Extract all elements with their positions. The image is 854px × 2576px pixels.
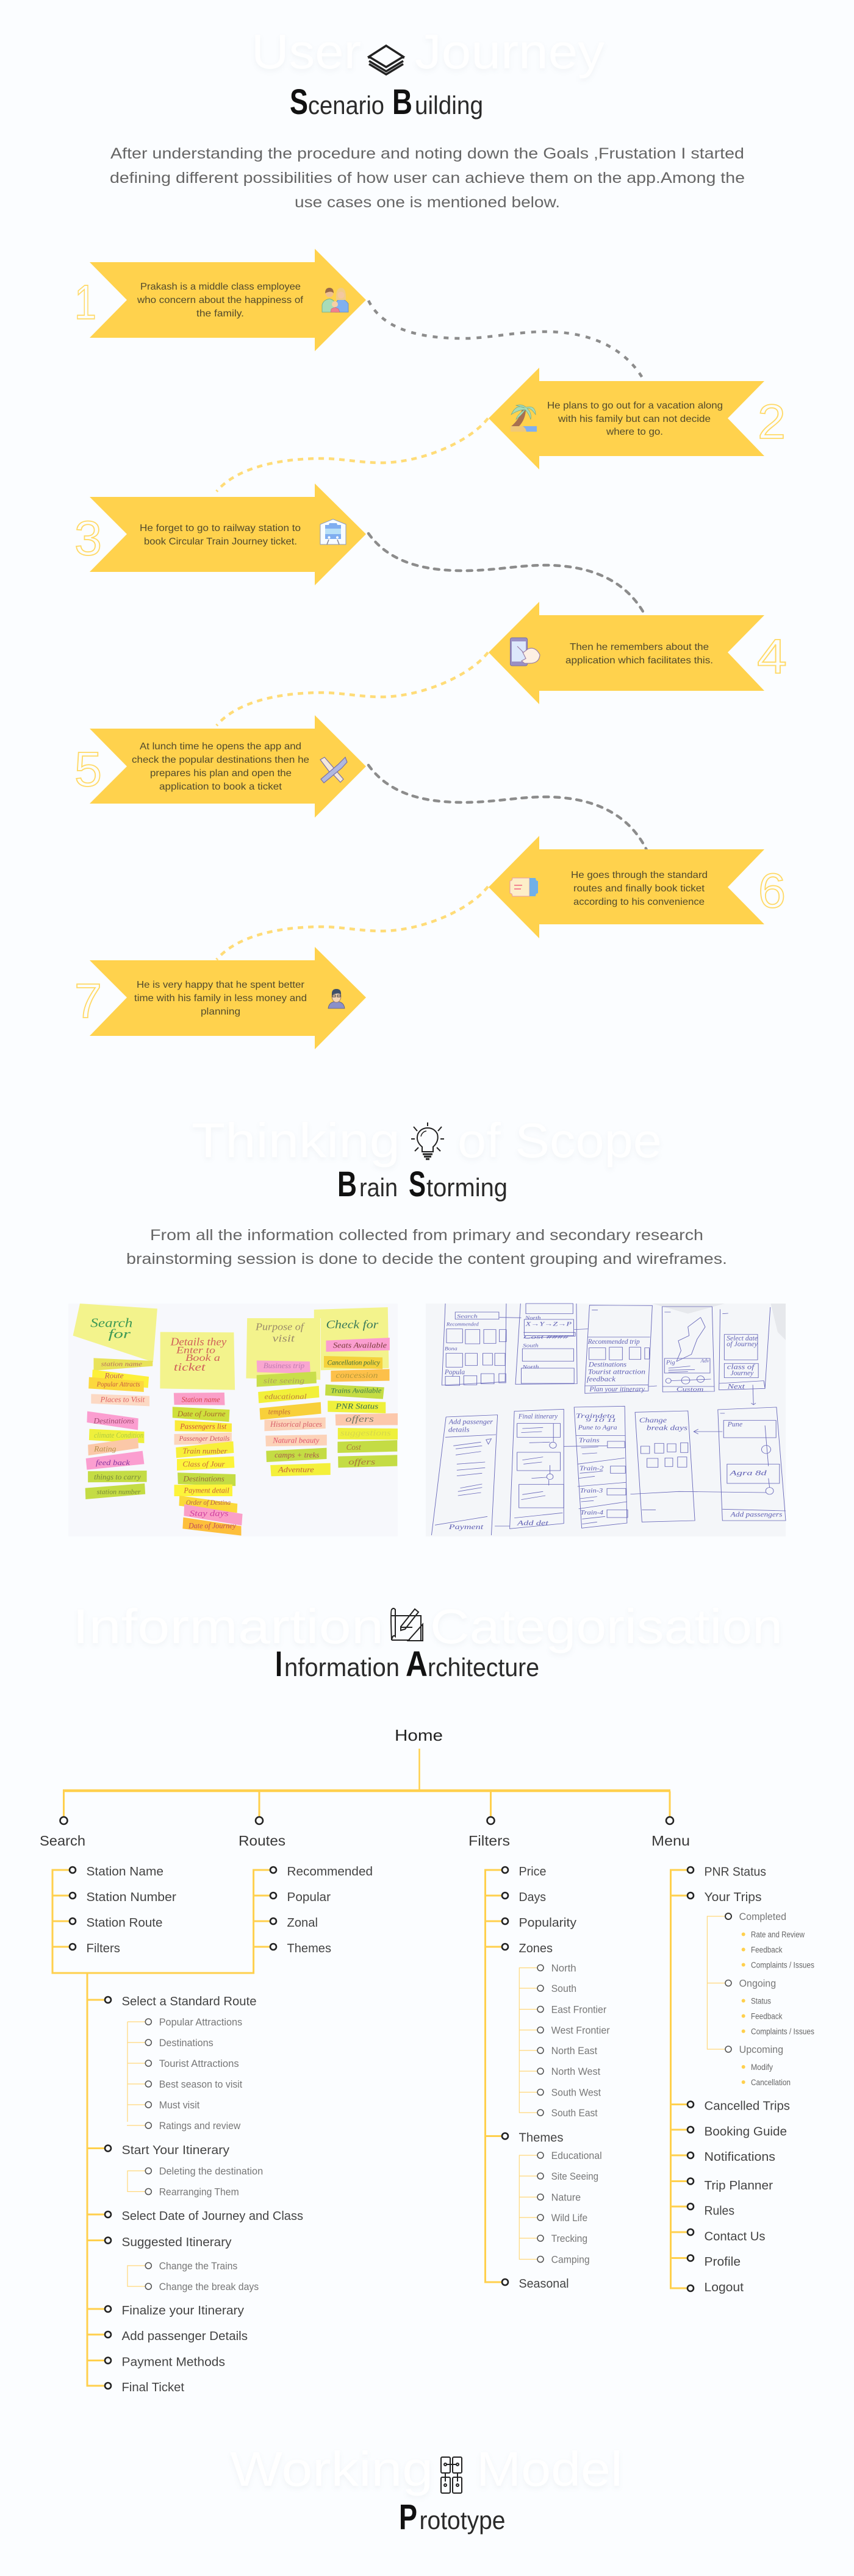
arrow 1: [90, 249, 366, 351]
sketch: journey date: Select date: [727, 1334, 758, 1342]
sub-branch: zones and themes: South: [551, 1983, 576, 1994]
connector: step 4 to 5: [217, 652, 488, 726]
heading: Prototype: P: [399, 2497, 417, 2537]
step 2: [489, 368, 786, 469]
notes column: purpose of visit: Historical places: [270, 1420, 322, 1429]
step 6: [489, 836, 786, 938]
notes column: check for: Trains Available: [331, 1388, 381, 1395]
sketch: add passenger details: [431, 1415, 498, 1535]
intro paragraph: After understanding the procedure and noting down the Goals ,Frustation I started: [110, 145, 744, 162]
sub-branch: your trips: Status: [751, 1996, 771, 2006]
notes column: purpose of visit: camps + treks: [274, 1451, 319, 1460]
sketch: home screen: Recommended: [446, 1322, 479, 1327]
branch: Filters: [468, 1833, 610, 2291]
icon: layers: [369, 46, 403, 74]
notes column: search for: Rating: [93, 1445, 117, 1454]
notes column: search for: Popular Attracts: [96, 1380, 140, 1388]
text 2: He plans to go out for a vacation along: [547, 401, 723, 411]
ghost title: Working Model: Working: [230, 2442, 433, 2496]
sketch: add passenger details: Payment: [448, 1523, 484, 1531]
sketch: final itinerary: Final itinerary: [518, 1412, 558, 1420]
branch: Menu: Trip Planner: [704, 2179, 773, 2192]
text 6: He goes through the standard: [571, 870, 708, 880]
heading: Information Architecture: A: [406, 1644, 428, 1684]
icon: phone and hand: [510, 638, 540, 666]
sub-branch: zones and themes: Camping: [551, 2253, 590, 2266]
sketch: change break days: break days: [647, 1424, 687, 1432]
ghost title: User Journey: User: [251, 24, 361, 79]
sub-branch: your trips: Complaints / Issues: [751, 2027, 814, 2036]
sub-branch: journey steps: Rearranging Them: [159, 2186, 239, 2197]
sub-branch: journey steps: Must visit: [159, 2099, 199, 2111]
sub-branch: journey steps: Tourist Attractions: [159, 2058, 239, 2069]
ghost title: Thinking of Scope: of Scope: [458, 1113, 662, 1168]
heading: Brain Storming: B: [337, 1165, 357, 1204]
branch: Menu: Profile: [704, 2255, 741, 2269]
branch: Search: Filters: [87, 1942, 120, 1955]
heading: Scenario Building: S: [290, 82, 308, 122]
notes column: search for: station name: [101, 1361, 142, 1368]
intro paragraph: use cases one is mentioned below.: [295, 194, 560, 211]
sub-branch: zones and themes: North East: [551, 2045, 597, 2057]
text 5: application to book a ticket: [159, 782, 282, 792]
sketch: train selection: Traindeta: [576, 1413, 615, 1419]
branch: Filters: Days: [518, 1891, 546, 1904]
sketch: train selection: Pune to Agra: [577, 1424, 617, 1431]
sub-branch: journey steps: [87, 1973, 303, 2394]
sketch: train selection: 9 10 11: [586, 1418, 617, 1424]
heading: Information Architecture: rchitecture: [428, 1653, 539, 1682]
notes column: search for: things to carry: [94, 1473, 141, 1481]
sketch: route list: Cost ####: [523, 1335, 569, 1340]
sub-branch: your trips: Complaints / Issues: [751, 1961, 814, 1969]
section: brainstorming: [68, 1113, 786, 1536]
text 2: [547, 401, 723, 437]
arrow 4: [489, 602, 764, 704]
number 5: 5: [74, 742, 102, 796]
sketch: final itinerary: [495, 1409, 564, 1529]
sketch: route plan: [718, 1407, 786, 1521]
sketch: journey date: [719, 1307, 770, 1405]
sub-branch: your trips: Ongoing: [739, 1978, 776, 1989]
notes column: check for: Cancellation policy: [328, 1360, 381, 1367]
sub-branch: zones and themes: Site Seeing: [551, 2171, 598, 2182]
text 5: prepares his plan and open the: [150, 768, 292, 779]
sub-branch: your trips: Feedback: [751, 1945, 783, 1955]
sketch: route plan: Agra 8d: [729, 1469, 767, 1477]
sub-branch: journey steps: Best season to visit: [159, 2078, 242, 2090]
tree trunk connectors: [60, 1749, 673, 1824]
sketch: route list: North: [525, 1315, 541, 1321]
text 7: planning: [201, 1007, 240, 1017]
text 7: [134, 980, 307, 1017]
branch: Menu: Your Trips: [704, 1891, 761, 1904]
number 3: 3: [74, 511, 102, 565]
notes column: details they enter: Order of Destina: [186, 1499, 231, 1507]
sub-branch: zones and themes: North: [551, 1962, 576, 1974]
arrow 3: [90, 483, 366, 585]
branch: Menu: Booking Guide: [704, 2125, 787, 2139]
sub-branch: your trips: Upcoming: [739, 2044, 783, 2055]
icon: man with glasses: [328, 989, 345, 1008]
branch: Menu: Cancelled Trips: [704, 2100, 790, 2113]
sketch: trip detail: Destinations: [588, 1360, 626, 1368]
text 4: Then he remembers about the: [570, 642, 709, 652]
ghost title: Working Model: Model: [476, 2442, 622, 2496]
step 7: [74, 947, 366, 1049]
branch: Search: [40, 1833, 303, 2394]
brainstorm paragraph: brainstorming session is done to decide the content grouping and wireframes.: [126, 1251, 727, 1268]
intro paragraph: defining different possibilities of how user can achieve them on the app.Among the: [110, 169, 745, 187]
connector: step 6 to 7: [217, 887, 488, 960]
sketch: journey date: Journey: [731, 1369, 754, 1377]
notes column: purpose of visit: site seeing: [264, 1377, 305, 1385]
heading: Brain Storming: torming: [426, 1173, 508, 1202]
sub-branch: your trips: Cancellation: [751, 2078, 791, 2087]
notes column: details they enter: Date of Journey: [188, 1521, 236, 1530]
sketch: home screen: Popula: [444, 1368, 465, 1376]
sketch: route list: [515, 1304, 588, 1384]
icon: blueprint and pencil: [391, 1608, 423, 1641]
label: Filters: Filters: [468, 1833, 510, 1849]
sub-branch: zones and themes: Trecking: [551, 2233, 587, 2244]
connector: step 3 to 4: [368, 533, 648, 621]
tree root: Home: Home: [395, 1726, 443, 1744]
notes column: search for: Destinations: [93, 1417, 134, 1425]
sub-branch: journey steps: Select Date of Journey and Class: [122, 2210, 303, 2223]
sketch: map route: Adv: [700, 1358, 709, 1364]
branch: Menu: PNR Status: [704, 1866, 766, 1879]
section: information architecture: [40, 1599, 814, 2394]
notes column: purpose of visit: Natural beauty: [272, 1436, 320, 1445]
sub-branch: zones and themes: North West: [551, 2066, 600, 2077]
branch: Filters: Themes: [518, 2132, 564, 2145]
notes column: details they enter: Station name: [182, 1396, 220, 1404]
text 6: routes and finally book ticket: [573, 883, 705, 894]
notes column: purpose of visit: [246, 1318, 331, 1476]
sub-branch: zones and themes: Nature: [551, 2191, 581, 2203]
sub-branch: journey steps: Change the break days: [159, 2281, 259, 2292]
notes column: details they enter: Destinations: [182, 1475, 224, 1483]
section: prototype: [230, 2442, 622, 2537]
label: Menu: Menu: [651, 1833, 690, 1849]
number 6: 6: [758, 863, 786, 918]
notes column: search for: for: [109, 1327, 131, 1341]
heading: Scenario Building: cenario: [308, 91, 384, 120]
sub-branch: journey steps: Add passenger Details: [122, 2330, 248, 2343]
text 3: book Circular Train Journey ticket.: [144, 537, 297, 547]
sketch: trip detail: feedback: [587, 1375, 616, 1383]
notes column: check for: concession: [336, 1371, 378, 1380]
notes column: check for: offers: [348, 1457, 375, 1466]
sub-branch: your trips: [707, 1911, 814, 2087]
icon: light bulb: [411, 1122, 444, 1159]
ghost title: User Journey: Journey: [415, 24, 605, 79]
sub-branch: your trips: Rate and Review: [751, 1930, 805, 1939]
sub-branch: journey steps: Start Your Itinerary: [122, 2144, 229, 2157]
branch: Menu: Contact Us: [704, 2230, 765, 2244]
sketch: change break days: [631, 1411, 766, 1522]
sub-branch: zones and themes: [519, 1962, 610, 2266]
sketch: map route: [662, 1307, 714, 1393]
notes column: purpose of visit: visit: [273, 1332, 295, 1344]
sub-branch: journey steps: Payment Methods: [122, 2356, 225, 2369]
photo: wireframe sketches: [426, 1304, 786, 1536]
step 1: [74, 249, 366, 351]
text 5: check the popular destinations then he: [132, 755, 309, 765]
sketch: trip detail: Plan your itinerary: [589, 1385, 645, 1393]
heading: Prototype: rototype: [420, 2506, 505, 2535]
heading: Information Architecture: I: [275, 1644, 282, 1684]
step 5: [74, 715, 366, 818]
icon: ticket: [510, 878, 538, 896]
sketch: trip detail: Recommended trip: [587, 1338, 640, 1346]
text 2: where to go.: [606, 427, 663, 437]
notes column: check for: Cost: [346, 1443, 362, 1452]
notes column: purpose of visit: temples: [268, 1408, 290, 1416]
text 2: with his family but can not decide: [558, 414, 711, 424]
sketch: journey date: class of: [727, 1363, 755, 1371]
sketch: home screen: Bona: [445, 1346, 458, 1352]
text 1: Prakash is a middle class employee: [140, 282, 301, 292]
notes column: check for: Seats Available: [333, 1341, 387, 1350]
sub-branch: zones and themes: Wild Life: [551, 2212, 587, 2224]
branch: Menu: Logout: [704, 2281, 744, 2294]
notes column: check for: offers: [345, 1415, 374, 1424]
sub-branch: journey steps: Change the Trains: [159, 2260, 237, 2272]
intro paragraph: [110, 145, 745, 211]
text 7: time with his family in less money and: [134, 993, 307, 1004]
branch: Filters: Zones: [518, 1942, 553, 1955]
ghost title: Informartion Categorisation: Categorisation: [430, 1599, 783, 1654]
notes column: purpose of visit: Purpose of: [255, 1321, 305, 1332]
label: Search: Search: [40, 1833, 85, 1849]
text 6: according to his convenience: [573, 897, 705, 907]
sub-branch: journey steps: Final Ticket: [122, 2381, 184, 2394]
branch: Filters: Seasonal: [518, 2277, 569, 2291]
branch: Search: Station Number: [87, 1891, 176, 1904]
text 5: At lunch time he opens the app and: [140, 741, 301, 752]
sub-branch: journey steps: Suggested Itinerary: [122, 2236, 232, 2249]
notes column: check for: PNR Status: [335, 1402, 378, 1411]
sketch: trip detail: [585, 1305, 657, 1393]
sketch: journey date: Next: [727, 1382, 745, 1390]
notes column: details they enter: Book a: [185, 1353, 220, 1363]
text 3: [140, 523, 301, 547]
sub-branch: your trips: Feedback: [751, 2012, 783, 2021]
notes column: purpose of visit: Adventure: [278, 1466, 314, 1474]
sketch: train selection: Train-4: [580, 1510, 604, 1516]
sub-branch: zones and themes: West Frontier: [551, 2024, 610, 2036]
sketch: map route: Pig: [666, 1360, 675, 1366]
notes column: details they enter: Class of Jour: [182, 1460, 225, 1468]
sub-branch: journey steps: Finalize your Itinerary: [122, 2304, 244, 2317]
photo: sticky notes: [68, 1304, 398, 1536]
sketch: train selection: [564, 1406, 628, 1528]
notes column: search for: Places to Visit: [100, 1396, 145, 1404]
sketch: final itinerary: Add det: [517, 1519, 549, 1527]
notes column: check for: Check for: [326, 1319, 379, 1332]
sketch: route plan: Add passengers: [730, 1510, 783, 1518]
notes column: details they enter: Details they: [170, 1336, 227, 1347]
brainstorm paragraph: From all the information collected from primary and secondary research: [150, 1227, 703, 1244]
text 7: He is very happy that he spent better: [137, 980, 305, 990]
sub-branch: your trips: Modify: [751, 2063, 773, 2072]
branch: Routes: [239, 1833, 373, 1955]
heading: Scenario Building: uilding: [415, 91, 483, 120]
sub-branch: journey steps: Ratings and review: [159, 2120, 241, 2132]
sketch: home screen: Search: [457, 1314, 478, 1319]
sketch: train selection: Trains: [579, 1437, 600, 1444]
sub-branch: your trips: Completed: [739, 1911, 786, 1922]
sketch: route list: North: [522, 1365, 539, 1370]
text 1: who concern about the happiness of: [137, 295, 304, 305]
branch: Menu: Rules: [704, 2205, 734, 2218]
notes column: details they enter: Payment detail: [183, 1486, 229, 1495]
notes column: details they enter: Passengers list: [179, 1422, 227, 1430]
arrow 6: [489, 836, 764, 938]
branch: Filters: Price: [518, 1865, 547, 1878]
branch: Routes: Themes: [287, 1942, 331, 1955]
notes column: purpose of visit: educational: [265, 1393, 307, 1401]
sketch: route list: X→Y→Z→P: [525, 1321, 572, 1327]
notes column: details they enter: Train number: [182, 1447, 228, 1455]
icon: palm tree: [511, 405, 537, 432]
sketch: trip detail: Tourist attraction: [588, 1368, 645, 1375]
sub-branch: zones and themes: Educational: [551, 2150, 602, 2161]
sketch: train selection: Train-3: [580, 1488, 603, 1494]
sketch: home screen: [442, 1304, 521, 1385]
branch: Filters: Popularity: [518, 1916, 576, 1930]
arrow 7: [90, 947, 366, 1049]
brainstorm paragraph: [126, 1227, 727, 1268]
branch: Search: Station Name: [87, 1865, 163, 1878]
step 4: [489, 602, 787, 704]
notes column: search for: climate Condition: [94, 1431, 143, 1440]
icon: train: [320, 519, 346, 544]
notes column: check for: [314, 1307, 398, 1468]
sub-branch: zones and themes: South West: [551, 2086, 601, 2099]
section: user journey: [110, 24, 745, 211]
text 5: [132, 741, 309, 792]
branch: Routes: Popular: [287, 1891, 331, 1904]
sketch: change break days: Change: [639, 1416, 667, 1424]
sketch: train selection: Train-2: [580, 1465, 604, 1472]
number 4: 4: [757, 629, 787, 683]
number 1: 1: [74, 275, 96, 329]
notes column: details they enter: Passenger Details: [179, 1435, 230, 1443]
text 1: [137, 282, 304, 319]
sub-branch: journey steps: Select a Standard Route: [122, 1995, 256, 2008]
icon: connected screens: [441, 2457, 462, 2493]
text 6: [571, 870, 708, 907]
icon: knife and fork: [320, 757, 347, 783]
heading: Brain Storming: S: [409, 1165, 426, 1204]
text 4: application which facilitates this.: [565, 655, 713, 666]
sketch: route plan: Pune: [727, 1420, 743, 1428]
text 1: the family.: [196, 309, 244, 319]
number 2: 2: [758, 394, 786, 449]
notes column: search for: [73, 1304, 157, 1499]
sub-branch: zones and themes: South East: [551, 2107, 598, 2119]
icon: family: [322, 288, 348, 312]
sketch: add passenger details: Add passenger: [448, 1418, 493, 1425]
notes column: search for: station number: [97, 1489, 141, 1496]
sketch: map route: Custom: [676, 1386, 703, 1393]
branch: Routes: Recommended: [287, 1865, 373, 1878]
text 3: He forget to go to railway station to: [140, 523, 301, 533]
heading: Information Architecture: nformation: [284, 1653, 400, 1682]
branch: Menu: Notifications: [704, 2150, 775, 2164]
sketch: journey date: of Journey: [727, 1340, 758, 1348]
notes column: details they enter: [160, 1332, 243, 1536]
label: Routes: Routes: [239, 1833, 285, 1849]
notes column: details they enter: Stay days: [190, 1509, 229, 1518]
notes column: details they enter: ticket: [174, 1361, 206, 1373]
notes column: details they enter: Enter to: [176, 1346, 215, 1356]
sketch: add passenger details: details: [448, 1425, 470, 1433]
branch: Routes: Zonal: [287, 1916, 318, 1930]
sub-branch: journey steps: Popular Attractions: [159, 2016, 242, 2028]
notes column: search for: feed back: [96, 1458, 130, 1467]
sub-branch: journey steps: Destinations: [159, 2037, 214, 2049]
notes column: check for: suggestions: [340, 1429, 391, 1438]
connector: step 2 to 3: [217, 418, 488, 491]
sub-branch: journey steps: Deleting the destination: [159, 2166, 263, 2177]
sub-branch: zones and themes: East Frontier: [551, 2003, 606, 2016]
ghost title: Informartion Categorisation: Informartion: [73, 1599, 384, 1654]
arrow 5: [90, 715, 366, 818]
connector: step 1 to 2: [368, 301, 643, 379]
sketch: route list: South: [523, 1343, 539, 1349]
text 4: [565, 642, 713, 666]
branch: Menu: [651, 1833, 814, 2294]
heading: Brain Storming: rain: [359, 1173, 398, 1202]
step 3: [74, 483, 366, 585]
notes column: details they enter: Date of Journe: [177, 1410, 226, 1418]
notes column: search for: Route: [104, 1372, 124, 1380]
ghost title: Thinking of Scope: Thinking: [192, 1113, 400, 1168]
branch: Search: Station Route: [87, 1916, 162, 1930]
number 7: 7: [74, 974, 102, 1028]
connector: step 5 to 6: [368, 765, 648, 852]
arrow 2: [489, 368, 764, 469]
heading: Scenario Building: B: [392, 82, 412, 122]
notes column: search for: Search: [90, 1316, 132, 1330]
notes column: purpose of visit: Business trip: [264, 1361, 305, 1370]
